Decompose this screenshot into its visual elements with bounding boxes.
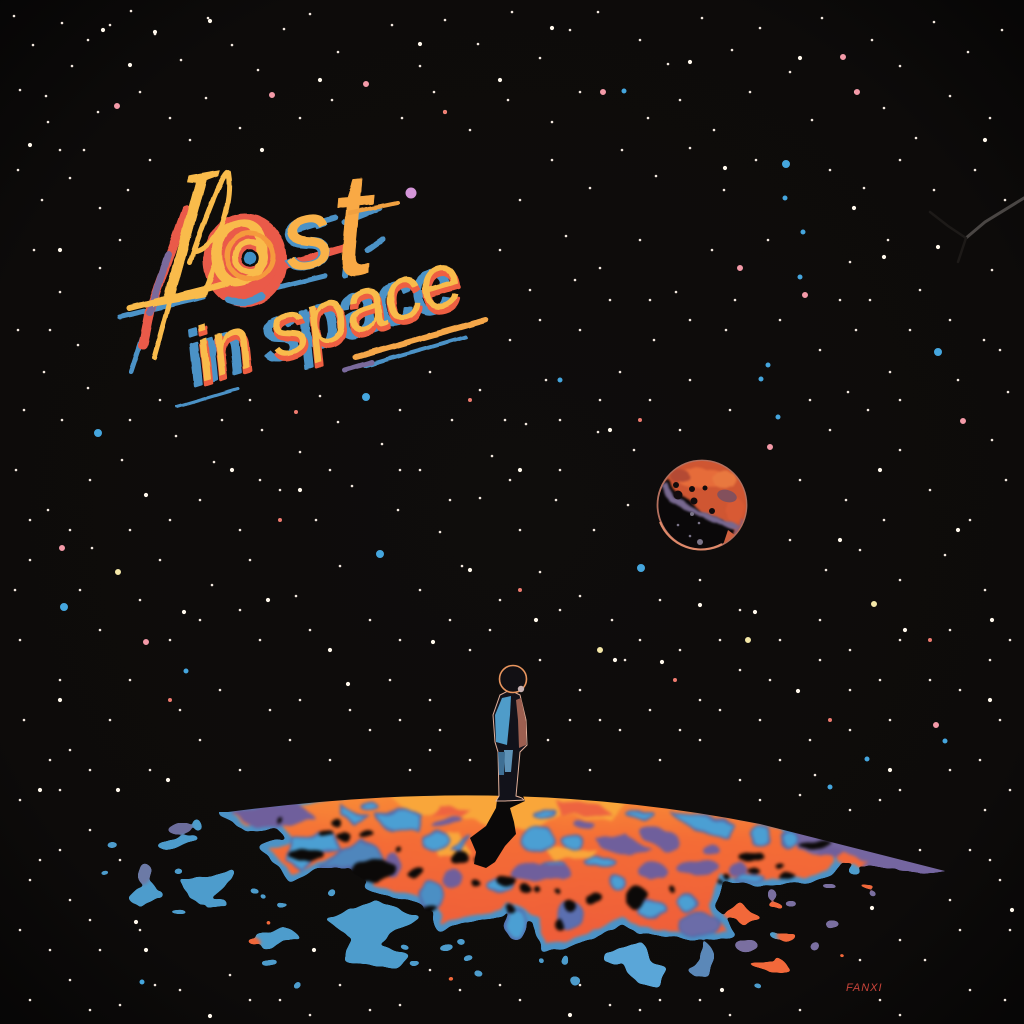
title loop flourish on the L: [190, 172, 229, 262]
swirl rings of the o: [227, 233, 273, 279]
moon: [656, 460, 748, 550]
cream stars: [118, 572, 874, 650]
worn scratch, top right: [930, 198, 1024, 262]
blue stars: [64, 164, 938, 607]
title flourish: L tail and crossbars: [130, 203, 398, 358]
title s: s: [272, 178, 341, 293]
boy's shadow: [470, 796, 525, 868]
planet surface: [101, 790, 950, 987]
black holes in the surface: [277, 817, 830, 931]
shirt highlights: [495, 696, 511, 745]
in space, red layer: in space: [184, 240, 472, 401]
title o: o: [192, 173, 284, 315]
pink stars: [62, 57, 963, 725]
main orange mass: [222, 790, 838, 948]
lilac star: [406, 188, 416, 198]
boy figure: [493, 666, 527, 801]
in space, yellow layer: in space: [183, 236, 471, 397]
artist signature: FANXI: [846, 982, 883, 994]
title backing: blue and red brush strokes: [120, 195, 382, 372]
title t: t: [323, 140, 386, 307]
title word: Lost, blue layer: s: [267, 176, 344, 295]
yellow highlight band: [391, 796, 626, 832]
in space, blue layer: in space: [174, 241, 462, 402]
scattered fragments left and below: [101, 819, 859, 987]
blue and purple blotches: [288, 802, 798, 939]
right purple tail: [794, 833, 945, 874]
title L: L: [145, 123, 248, 350]
hand-painted title: [120, 123, 486, 407]
underlines: [177, 320, 486, 407]
